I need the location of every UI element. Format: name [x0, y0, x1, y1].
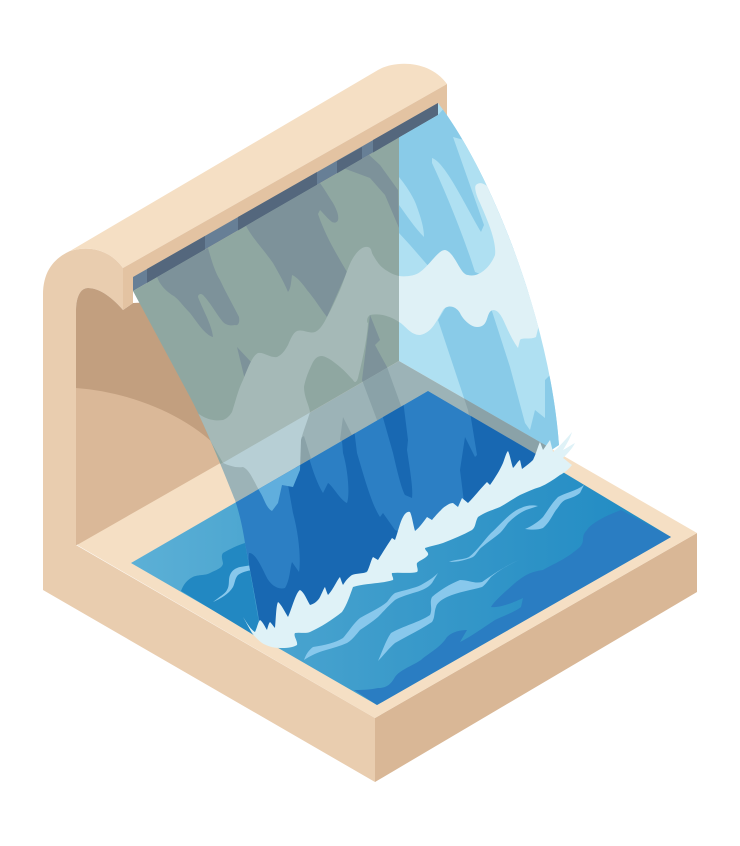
- ripple upper: [449, 505, 538, 562]
- pool dark patch right: [354, 510, 671, 705]
- ripple long: [378, 560, 519, 661]
- basin front-left face: [43, 249, 375, 782]
- cavity lower wall: [76, 388, 260, 545]
- curtain over open air: [399, 103, 559, 450]
- water outlet slot: [133, 103, 438, 291]
- curtain over basin floor: [220, 361, 552, 502]
- curtain over pool: [236, 391, 536, 630]
- pool of water: [131, 391, 671, 705]
- ripple middle: [304, 573, 438, 660]
- pool dark patch left: [181, 543, 262, 640]
- curtain over back wall: [133, 138, 399, 464]
- capstone lip: [123, 84, 447, 310]
- basin floor and rim: [77, 361, 697, 718]
- capstone top surface: [70, 64, 447, 268]
- basin right face: [375, 533, 697, 782]
- ripple far right: [525, 485, 584, 530]
- wall cavity shadow: [76, 288, 280, 545]
- illustration: isometric waterfall fountain: [43, 64, 697, 782]
- falling water curtain: [133, 103, 559, 630]
- splash foam line: [243, 432, 575, 648]
- ripple left: [213, 565, 252, 602]
